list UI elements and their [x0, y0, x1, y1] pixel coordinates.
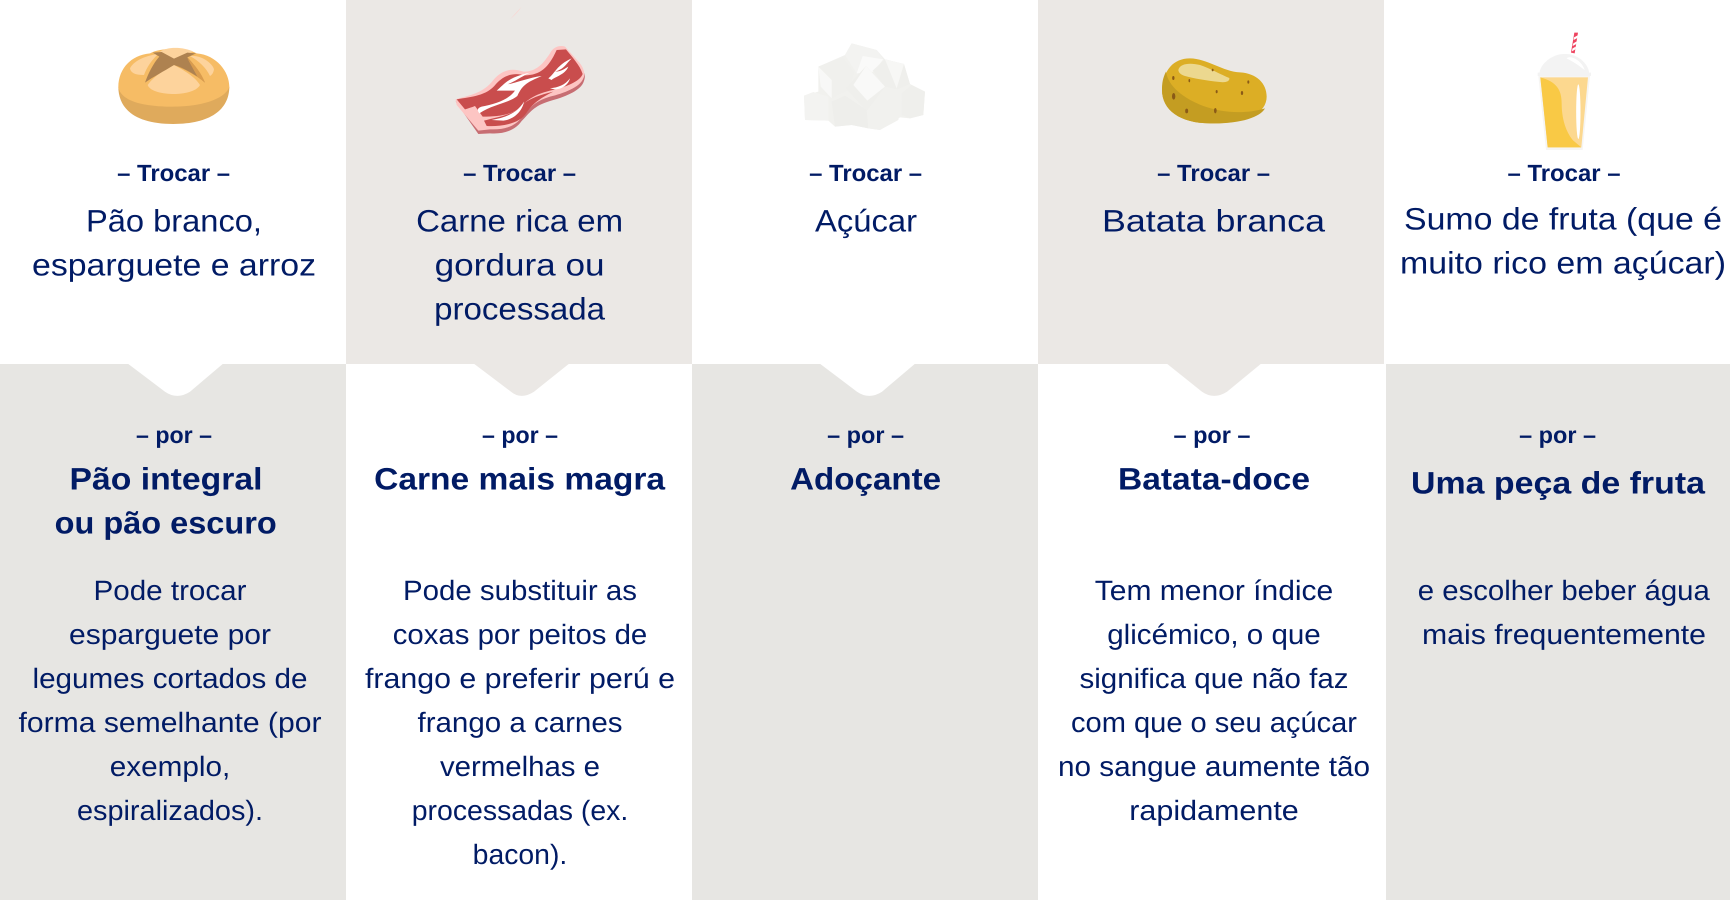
arrow notch: column 2	[474, 364, 569, 396]
body text: rapidamente	[1129, 795, 1299, 826]
column 4: swap from	[1102, 160, 1326, 238]
column 5: swap from	[1400, 160, 1726, 280]
arrow notch: column 3	[820, 364, 915, 396]
body text: Tem menor índice	[1095, 575, 1333, 606]
body text: glicémico, o que	[1107, 619, 1321, 650]
bottom panel: column 5 background	[1386, 364, 1730, 900]
food name: fatty meat: Carne rica em	[416, 204, 623, 238]
bottom panel: column 3 background	[692, 364, 1038, 900]
body text: Pode trocar	[94, 575, 246, 606]
column 1: swap from	[32, 160, 316, 282]
bottom panel: column 1 background	[0, 364, 346, 900]
heading: piece of fruit: Uma peça de fruta	[1411, 466, 1706, 500]
food name: white bread: Pão branco,	[86, 204, 262, 238]
label: Trocar: – Trocar –	[463, 160, 576, 186]
food name: white bread: esparguete e arroz	[32, 248, 316, 282]
food name: white potato: Batata branca	[1102, 204, 1326, 238]
body text	[18, 575, 322, 826]
label: Trocar: – Trocar –	[1157, 160, 1270, 186]
top panel: column 4 background	[1038, 0, 1384, 364]
label: por: – por –	[1519, 422, 1596, 448]
icon: bread roll	[118, 48, 229, 124]
body text: espiralizados).	[77, 795, 263, 826]
heading: leaner meat: Carne mais magra	[374, 462, 666, 496]
body text: coxas por peitos de	[393, 619, 647, 650]
body text: com que o seu açúcar	[1071, 707, 1357, 738]
body text	[1418, 575, 1710, 650]
body text: legumes cortados de	[32, 663, 307, 694]
label: Trocar: – Trocar –	[1508, 160, 1620, 186]
food name: fruit juice: muito rico em açúcar)	[1400, 246, 1726, 280]
food name: fatty meat: processada	[434, 292, 606, 326]
heading: wholegrain bread	[55, 462, 277, 540]
body text: exemplo,	[110, 751, 230, 782]
food name: white bread	[32, 204, 316, 282]
food name: fruit juice	[1400, 202, 1726, 280]
body text: frango a carnes	[418, 707, 622, 738]
body text: mais frequentemente	[1422, 619, 1706, 650]
top panel: column 2 background	[346, 0, 692, 364]
arrow notch: column 4	[1167, 364, 1261, 396]
heading: wholegrain bread: Pão integral	[70, 462, 262, 496]
column 2: swap from	[416, 160, 623, 326]
body text: bacon).	[473, 839, 567, 870]
food name: fatty meat	[416, 204, 623, 326]
icon: potato	[1162, 58, 1267, 123]
column 3: swap to	[790, 422, 941, 496]
body text: forma semelhante (por	[18, 707, 322, 738]
icon: juice cup	[1538, 33, 1591, 150]
body text: no sangue aumente tão	[1058, 751, 1370, 782]
body text: Pode substituir as	[403, 575, 637, 606]
arrow notch: column 1	[128, 364, 223, 396]
body text	[365, 575, 675, 870]
column 5: swap to	[1411, 422, 1710, 650]
column 3: swap from	[809, 160, 922, 238]
body text: vermelhas e	[440, 751, 600, 782]
food name: sugar: Açúcar	[815, 204, 917, 238]
heading: sweetener: Adoçante	[790, 462, 941, 496]
heading: wholegrain bread: ou pão escuro	[55, 506, 277, 540]
label: por: – por –	[482, 422, 558, 448]
body text: significa que não faz	[1080, 663, 1348, 694]
column 2: swap to	[365, 422, 675, 870]
icon: sugar cubes	[804, 43, 925, 130]
body text: processadas (ex.	[412, 795, 628, 826]
food name: fatty meat: gordura ou	[435, 248, 605, 282]
label: por: – por –	[136, 422, 212, 448]
label: Trocar: – Trocar –	[809, 160, 922, 186]
body text: esparguete por	[69, 619, 271, 650]
label: Trocar: – Trocar –	[117, 160, 230, 186]
food name: fruit juice: Sumo de fruta (que é	[1404, 202, 1722, 236]
body text: e escolher beber água	[1418, 575, 1710, 606]
icon: bacon	[456, 7, 585, 134]
label: por: – por –	[827, 422, 904, 448]
heading: sweet potato: Batata-doce	[1118, 462, 1310, 496]
column 4: swap to	[1058, 422, 1370, 826]
label: por: – por –	[1174, 422, 1250, 448]
body text: frango e preferir perú e	[365, 663, 675, 694]
body text	[1058, 575, 1370, 826]
column 1: swap to	[18, 422, 322, 826]
